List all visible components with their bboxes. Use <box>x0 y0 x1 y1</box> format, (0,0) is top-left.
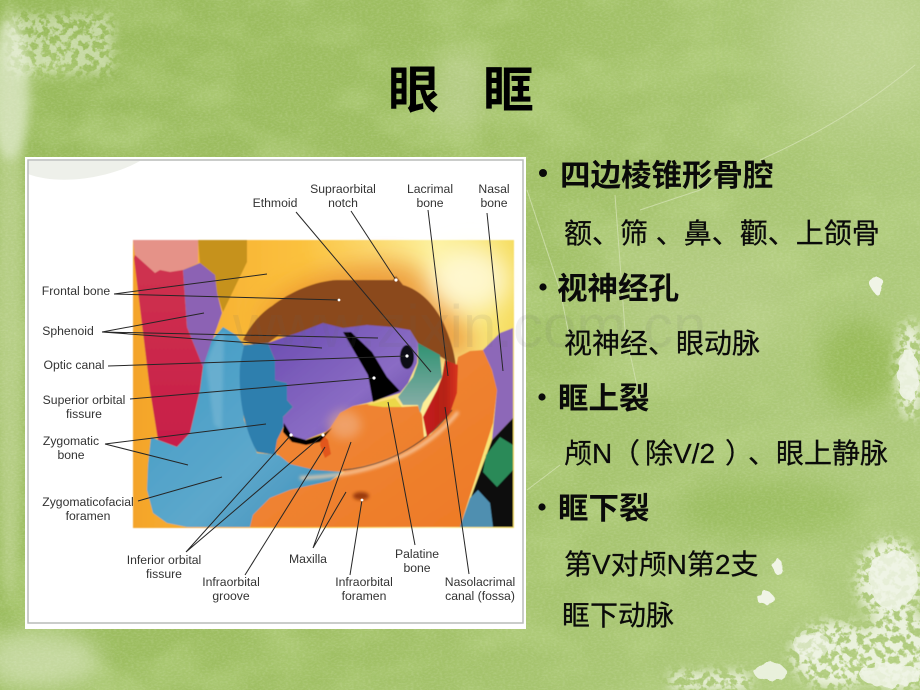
anatomical labels: Ethmoid <box>253 196 297 210</box>
anatomical labels: Zygomaticofacial <box>42 495 134 509</box>
bullet 3: 除V/2 <box>645 438 715 469</box>
optic canal opening <box>400 345 414 369</box>
green turbinate <box>483 437 513 487</box>
title: 眶 <box>483 62 534 119</box>
purple orbital interior <box>268 323 418 442</box>
anatomical labels: notch <box>328 196 358 210</box>
anatomical labels: groove <box>212 589 250 603</box>
inferior orbital fissure <box>283 423 332 445</box>
bullet 3: ） <box>725 438 753 469</box>
anatomical labels <box>42 182 515 603</box>
anatomical labels: Infraorbital <box>335 575 393 589</box>
anatomical labels: canal (fossa) <box>445 589 515 603</box>
zygomatic bone <box>147 327 345 527</box>
anatomical labels: foramen <box>342 589 386 603</box>
bullet 4: 眶下动脉 <box>562 600 674 631</box>
palatine bone <box>367 398 402 407</box>
bullet 3: 、 <box>748 438 776 469</box>
nasal bone <box>483 328 513 440</box>
illustration: coloured bones of the orbit <box>133 240 514 528</box>
bullet 4: 眶下裂 <box>558 492 650 526</box>
bullet 1: 四边棱锥形骨腔 <box>560 159 774 193</box>
anatomical labels: Zygomatic <box>43 434 99 448</box>
bullet 3: 眶上裂 <box>558 382 650 416</box>
anatomical labels: Nasolacrimal <box>445 575 515 589</box>
anatomical labels: fissure <box>66 407 102 421</box>
anatomical labels: bone <box>480 196 508 210</box>
anatomical labels: Infraorbital <box>202 575 260 589</box>
anatomical labels: Palatine <box>395 547 439 561</box>
sphenoid, lateral purple <box>183 263 222 367</box>
anatomical labels: Superior orbital <box>43 393 125 407</box>
bullet 2 <box>539 272 760 359</box>
bullet 1: 额、筛 、鼻、颧、上颌骨 <box>564 218 880 249</box>
leader end dots <box>289 278 409 501</box>
bullet 3: （ <box>612 438 640 469</box>
superior orbital fissure <box>343 332 400 402</box>
panel: anatomical figure of the orbit <box>25 157 526 629</box>
lacrimal bone <box>423 360 458 437</box>
maxilla <box>250 350 497 527</box>
lateral orbital wall <box>240 343 293 455</box>
watermark: www.zixin.com.cn <box>232 293 706 360</box>
bullet 1 <box>539 159 880 249</box>
temporal bone: pink and red <box>134 255 203 447</box>
anatomical labels: Maxilla <box>289 552 327 566</box>
bullet 4 <box>538 492 758 631</box>
bullet 4: 第V对颅N第2支 <box>564 549 758 580</box>
frontal bone <box>133 240 514 528</box>
bullet 3: 眼上静脉 <box>776 438 888 469</box>
bullet 3: 颅N <box>564 438 612 469</box>
anatomical labels: bone <box>403 561 431 575</box>
anatomical labels: Nasal <box>478 182 510 196</box>
anatomical labels: Sphenoid <box>42 324 94 338</box>
dark nasal cavity <box>460 418 513 527</box>
anatomical labels: bone <box>57 448 85 462</box>
anatomical labels: fissure <box>146 567 182 581</box>
anatomical labels: Inferior orbital <box>127 553 201 567</box>
anatomical labels: bone <box>416 196 444 210</box>
anatomical labels: foramen <box>66 509 110 523</box>
ethmoid bone <box>398 343 442 413</box>
bullet 2: 视神经孔 <box>557 272 679 306</box>
blue turbinate <box>460 490 493 527</box>
bullet 2: 视神经、眼动脉 <box>564 328 760 359</box>
brown orbital roof <box>243 276 456 366</box>
panel frame <box>25 157 526 629</box>
anatomical labels: Lacrimal <box>407 182 453 196</box>
leader lines <box>102 210 503 575</box>
anatomical labels: Frontal bone <box>42 284 110 298</box>
anatomical labels: Supraorbital <box>310 182 376 196</box>
anatomical labels: Optic canal <box>44 358 104 372</box>
text block: bullet list <box>538 159 888 631</box>
title: 眼 <box>388 62 439 119</box>
bullet 3 <box>538 382 888 469</box>
